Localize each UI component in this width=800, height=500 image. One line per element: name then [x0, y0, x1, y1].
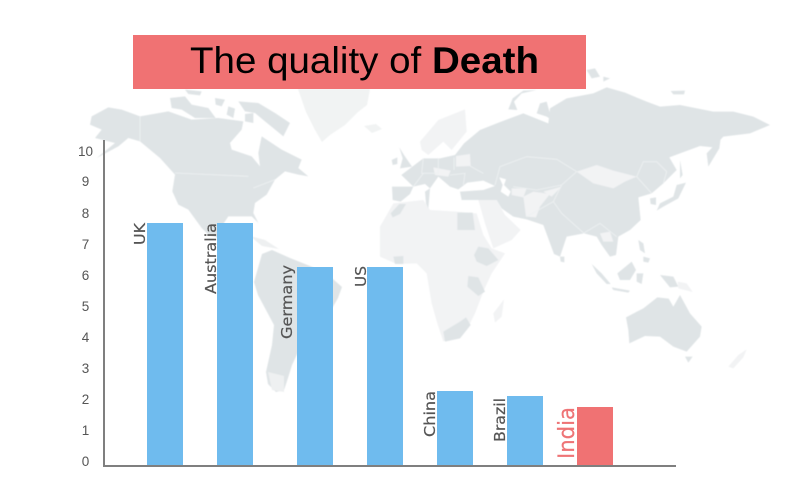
- y axis labels: 4: [82, 330, 90, 345]
- y axis labels: 8: [82, 206, 89, 221]
- map: Europe islands and Iberia: [392, 147, 430, 208]
- map: Africa and Arabia: [380, 200, 521, 342]
- y axis labels: 1: [82, 423, 89, 438]
- label: UK: UK: [131, 222, 149, 245]
- y axis labels: [78, 144, 93, 469]
- bar: China: [437, 391, 473, 466]
- title banner: [133, 35, 586, 89]
- y axis labels: 10: [78, 144, 93, 159]
- title text: The quality of Death: [190, 40, 539, 81]
- map: Caspian Sea: [499, 177, 511, 197]
- bar: Brazil: [507, 396, 543, 466]
- bar: US: [367, 267, 403, 466]
- map: New Guinea east and New Zealand: [678, 282, 747, 368]
- map: Australia: [626, 295, 702, 363]
- bar: Germany: [297, 267, 333, 466]
- map: Asian islands: [508, 68, 721, 293]
- y axis labels: 2: [82, 392, 89, 407]
- map: dark African countries: [391, 204, 498, 342]
- map: South America: [254, 250, 342, 392]
- y axis labels: 6: [82, 268, 89, 283]
- map: Scandinavia, Belarus and light countries: [420, 109, 637, 242]
- bar chart: [147, 223, 613, 466]
- label: US: US: [352, 266, 370, 287]
- bar: Australia: [217, 223, 253, 466]
- map: Eurasia landmass: [401, 87, 770, 257]
- y axis labels: 9: [82, 174, 89, 189]
- bar labels: [131, 222, 580, 459]
- y axis labels: 5: [82, 299, 89, 314]
- background world map: [90, 68, 770, 392]
- label: China: China: [421, 391, 439, 437]
- bar: India: [577, 407, 613, 466]
- bar: UK: [147, 223, 183, 466]
- chart axes: [104, 140, 676, 466]
- label: Germany: Germany: [278, 265, 296, 339]
- map: Central America: [250, 236, 279, 249]
- map: North America: [90, 90, 308, 238]
- label: Australia: Australia: [202, 223, 220, 294]
- y axis labels: 3: [82, 361, 89, 376]
- label: Brazil: Brazil: [491, 398, 509, 442]
- label: India: India: [555, 407, 580, 459]
- map: Greenland and Iceland: [298, 89, 382, 142]
- map: Asian country borders: [413, 157, 667, 237]
- y axis labels: 7: [82, 237, 89, 252]
- y axis labels: 0: [82, 454, 89, 469]
